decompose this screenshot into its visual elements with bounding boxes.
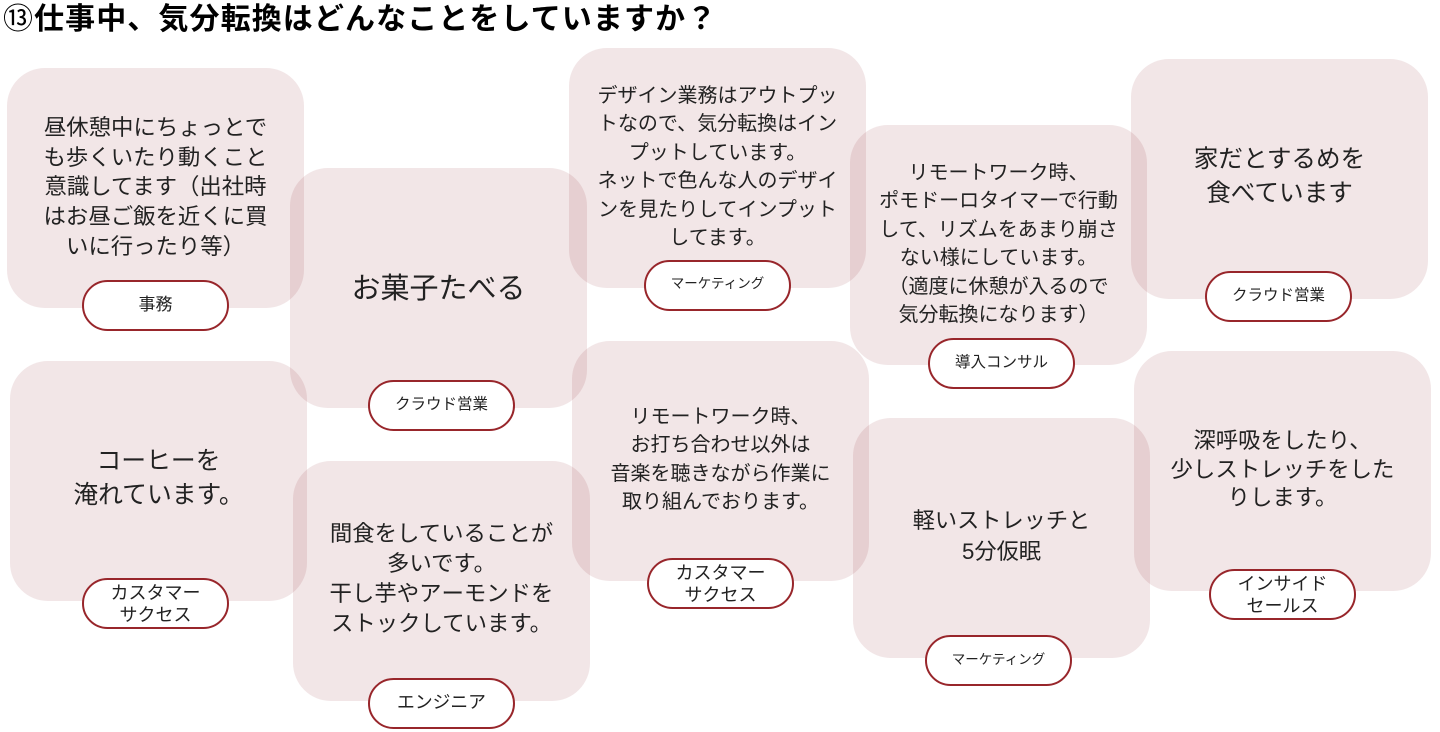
comment text: 意識してます（出社時 [44,174,267,199]
comment text: 昼休憩中にちょっとで [44,115,267,140]
comment text: 少しストレッチをした [1171,456,1394,482]
comment text: コーヒーを [96,448,220,475]
comment text: 5分仮眠 [962,538,1041,564]
panel: card 3 カスタマーサクセス [10,361,307,629]
comment text [330,521,553,636]
title: ⑬仕事中、気分転換はどんなことをしていますか？ [3,3,717,36]
comment text: してます。 [669,227,766,249]
comment text: ストックしています。 [331,611,552,636]
panel: card 9 クラウド営業 [1131,59,1428,322]
comment text: 食べています [1206,180,1353,206]
job label pill [368,380,515,431]
comment text [1194,146,1365,206]
comment text: プットしています。 [629,142,806,164]
comment text: 気分転換になります） [898,304,1098,326]
card background [1131,59,1428,299]
comment text [1171,428,1394,510]
job label pill: カスタマー [110,582,200,602]
comment text: お打ち合わせ以外は [630,434,810,456]
comment text: はお昼ご飯を近くに買 [44,204,267,229]
job label pill [644,260,791,311]
comment text: ポモドーロタイマーで行動 [879,190,1118,212]
comment text: ない様にしています。 [900,247,1097,269]
comment text: 家だとするめを [1194,146,1365,173]
card background [10,361,307,601]
job label pill: 導入コンサル [955,354,1048,371]
job label pill [925,635,1072,686]
comment text: 淹れています。 [73,482,244,509]
panel: card 1 事務 [7,68,304,331]
comment text: りします。 [1228,485,1337,510]
job label pill [1209,569,1356,620]
panel: card 6 カスタマーサクセス [572,341,869,609]
card background [853,418,1150,658]
comment text: 干し芋やアーモンドを [330,581,553,606]
card background [572,341,869,581]
job label pill: セールス [1246,596,1318,616]
comment text: も歩くいたり動くこと [44,145,267,170]
panel: card 4 エンジニア [293,461,590,729]
comment text [598,84,838,249]
panel: card 8 マーケティング [853,418,1150,686]
comment text: ネットで色んな人のデザイ [598,170,838,192]
job label pill [82,578,229,629]
comment text: して、リズムをあまり崩さ [879,219,1118,241]
comment text [44,115,267,259]
job label pill: サクセス [120,604,192,624]
comment text [610,406,830,513]
comment text: リモートワーク時、 [630,406,810,428]
card background [7,68,304,308]
comment text: 音楽を聴きながら作業に [610,463,830,485]
panel: card 7 導入コンサル [850,125,1147,389]
job label pill [82,280,229,331]
job label pill: マーケティング [952,652,1045,667]
job label pill: カスタマー [676,562,766,582]
job label pill [368,678,515,729]
job label pill: サクセス [684,584,756,604]
comment text: お菓子たべる [351,273,526,305]
comment text: 軽いストレッチと [913,508,1090,533]
job label pill [647,558,794,609]
comment text [73,448,244,509]
job label pill: 事務 [138,294,172,314]
comment text: （適度に休憩が入るので [888,276,1108,298]
comment text: 深呼吸をしたり、 [1193,428,1372,453]
comment text: 多いです。 [387,551,496,576]
panel: card 2 クラウド営業 [290,168,587,431]
comment text: いに行ったり等） [66,234,245,259]
job label pill: クラウド営業 [395,396,488,413]
card background [569,48,866,288]
comment text: 間食をしていることが [330,521,553,546]
job label pill: マーケティング [671,276,764,291]
card background [850,125,1147,365]
job label pill [928,338,1075,389]
comment text: デザイン業務はアウトプッ [598,85,838,107]
job label pill: インサイド [1238,574,1328,594]
card background [290,168,587,408]
comment text: トなので、気分転換はイン [598,113,837,135]
comment text [913,508,1090,564]
comment text: ンを見たりしてインプット [598,199,837,221]
card background [1134,351,1431,591]
job label pill [1205,271,1352,322]
comment text: 取り組んでおります。 [622,491,819,513]
panel: card 10 インサイドセールス [1134,351,1431,620]
job label pill: エンジニア [397,692,486,712]
job label pill: クラウド営業 [1232,286,1325,304]
comment text [879,162,1118,326]
panel: card 5 マーケティング [569,48,866,311]
comment text: リモートワーク時、 [908,162,1088,184]
card background [293,461,590,701]
